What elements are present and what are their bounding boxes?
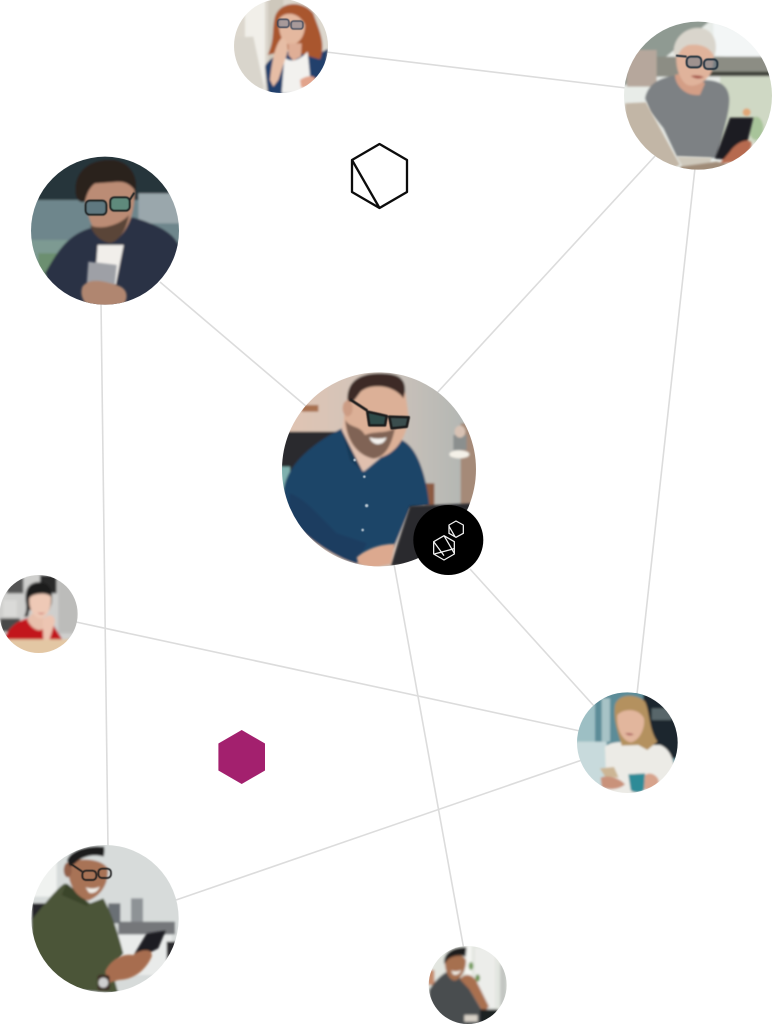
portrait: central man with tablet [280,370,480,570]
glasses [278,19,303,29]
glasses [86,193,134,215]
glasses [70,863,111,880]
portrait: woman in white shirt with teal cup [577,692,678,793]
icon: outline hexagon [352,144,407,208]
icon: magenta hexagon [218,730,265,784]
glasses [676,56,717,69]
portrait: older woman with phone and laptop [620,18,772,175]
connecting lines [76,52,695,950]
portrait: man in green shirt with tablet [31,845,179,992]
icon badge: black circle with hexagons [413,505,483,575]
portrait: woman in red at bookshelf [0,575,78,653]
portrait: man in grey shirt with folded hands [428,946,507,1024]
portrait: man in blazer with phone [31,156,179,305]
portrait: red-haired woman in navy blazer [234,0,328,93]
